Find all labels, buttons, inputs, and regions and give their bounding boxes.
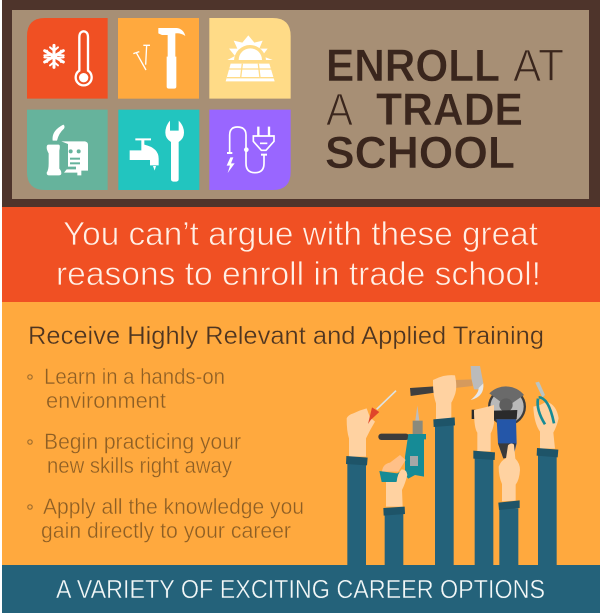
banner text: reasons to enroll in trade school! <box>56 255 541 292</box>
bullet list <box>28 364 304 543</box>
icon: snowflake and thermometer tile <box>27 18 108 99</box>
icon grid <box>27 18 291 190</box>
arm with hammer <box>410 366 483 567</box>
panel: red banner <box>2 207 600 302</box>
bullet three: Apply all the knowledge you <box>43 494 304 519</box>
bullet one <box>28 364 225 413</box>
icon: hammer and nails tile <box>118 18 199 99</box>
arm with drill <box>378 405 426 567</box>
arm with screwdriver <box>346 391 396 567</box>
title: AT <box>513 40 564 91</box>
bullet one: environment <box>46 388 167 413</box>
banner text <box>56 215 541 292</box>
section heading: Receive Highly Relevant and Applied Training <box>28 322 544 350</box>
banner text: You can’t argue with these great <box>63 215 538 252</box>
icon: tap and wrench tile <box>118 110 199 190</box>
panel: training <box>2 302 600 567</box>
arm with angle grinder <box>472 386 526 567</box>
panel: bottom banner <box>2 565 600 613</box>
bullet three <box>28 494 304 543</box>
title: SCHOOL <box>325 127 515 178</box>
illustration: raised hands with tools <box>346 366 559 567</box>
icon: solar panel tile <box>209 18 291 99</box>
title <box>325 40 564 178</box>
title: A <box>326 84 353 135</box>
bullet three: gain directly to your career <box>41 518 291 543</box>
arm with pliers <box>533 382 559 567</box>
banner caption: A VARIETY OF EXCITING CAREER OPTIONS <box>56 574 545 604</box>
title: TRADE <box>376 84 523 135</box>
bullet two <box>28 429 241 478</box>
bullet two: Begin practicing your <box>44 429 241 454</box>
title: ENROLL <box>326 40 500 91</box>
icon: electric plug tile <box>209 110 291 190</box>
icon: generator tile <box>27 110 108 190</box>
bullet one: Learn in a hands-on <box>44 364 225 389</box>
panel: header <box>2 0 600 207</box>
bullet two: new skills right away <box>47 453 233 478</box>
